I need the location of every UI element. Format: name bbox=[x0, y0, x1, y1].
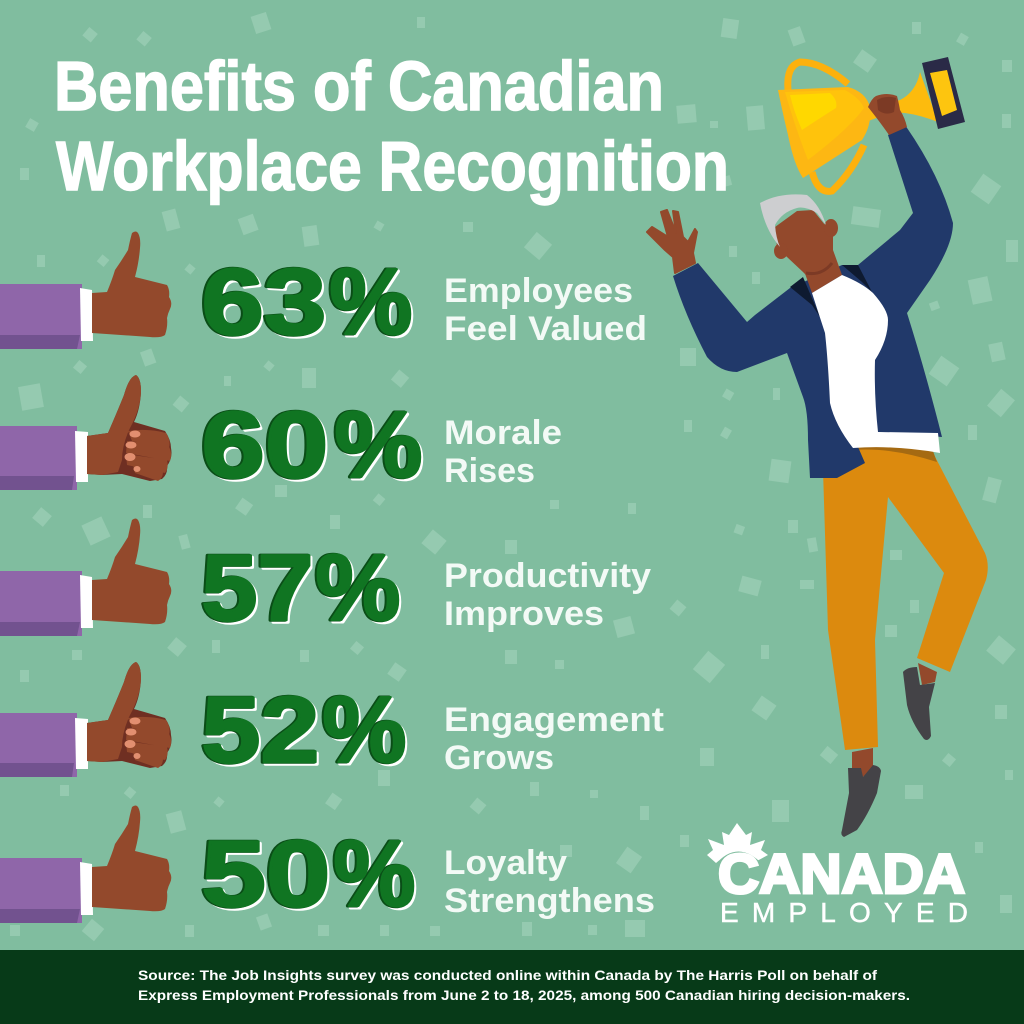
label bbox=[444, 414, 562, 490]
percentage 52: 52 bbox=[203, 679, 321, 784]
label bbox=[444, 701, 664, 777]
stat row: 63% employees feel valued bbox=[0, 232, 647, 356]
icon: thumbs up bbox=[0, 232, 171, 349]
percentage 50 bbox=[200, 821, 417, 928]
label bbox=[444, 844, 655, 920]
percentage 57: % bbox=[317, 537, 402, 642]
percentage 50: % bbox=[335, 823, 417, 928]
percentage 57: 57 bbox=[202, 535, 314, 640]
label: Morale bbox=[444, 414, 562, 452]
percentage 52: % bbox=[322, 677, 406, 782]
percentage 50: 50 bbox=[202, 821, 330, 926]
icon: thumbs up, back of hand bbox=[0, 662, 172, 777]
percentage 52: 52 bbox=[200, 677, 318, 782]
percentage 60: % bbox=[334, 392, 422, 497]
illustration: jumping person bbox=[647, 94, 988, 837]
title: Workplace Recognition bbox=[56, 127, 729, 205]
waving left hand bbox=[647, 210, 697, 273]
percentage 50: 50 bbox=[200, 821, 329, 926]
percentage 63: % bbox=[331, 251, 414, 356]
percentage 60: 60 bbox=[203, 394, 330, 499]
logo: Canada Employed bbox=[707, 823, 968, 928]
percentage 57: 57 bbox=[200, 535, 312, 640]
percentage 60: 60 bbox=[202, 392, 328, 497]
label: Employees bbox=[444, 272, 633, 310]
neck bbox=[803, 250, 842, 293]
collar bbox=[790, 277, 820, 317]
percentage 63 bbox=[200, 249, 414, 356]
percentage 50: % bbox=[332, 821, 414, 926]
icon: thumbs up bbox=[0, 806, 171, 923]
logo: Canada Employed: EMPLOYED bbox=[720, 897, 968, 928]
socks bbox=[852, 748, 873, 777]
label bbox=[444, 557, 651, 633]
label: Improves bbox=[444, 595, 604, 633]
jacket bbox=[673, 125, 953, 478]
percentage 50: % bbox=[334, 821, 416, 926]
percentage 63: 63 bbox=[200, 249, 325, 354]
source text: Source: The Job Insights survey was conducted online within Canada by The Harris Poll on behalf of bbox=[138, 968, 878, 983]
stat row: 57% productivity improves bbox=[0, 518, 651, 642]
label: Engagement bbox=[444, 701, 664, 739]
icon: maple leaf bbox=[707, 823, 768, 863]
percentage 50: 50 bbox=[203, 823, 332, 928]
percentage 63: 63 bbox=[203, 251, 328, 356]
percentage 57: 57 bbox=[203, 537, 315, 642]
source footer bbox=[0, 950, 1024, 1024]
head bbox=[775, 210, 833, 279]
source text: Express Employment Professionals from June 2 to 18, 2025, among 500 Canadian hiring decision-makers. bbox=[138, 988, 910, 1003]
label: Rises bbox=[444, 452, 535, 490]
label: Loyalty bbox=[444, 844, 567, 882]
stat row: 50% loyalty strengthens bbox=[0, 806, 655, 928]
percentage 60: % bbox=[336, 394, 424, 499]
label: Strengthens bbox=[444, 882, 655, 920]
illustration: trophy bbox=[778, 57, 965, 191]
logo: Canada Employed: CANADA bbox=[718, 842, 965, 905]
grey hair bbox=[760, 194, 826, 247]
percentage 60: % bbox=[333, 392, 421, 497]
percentage 52: % bbox=[324, 679, 408, 784]
raised hand on trophy bbox=[868, 94, 907, 135]
label: Grows bbox=[444, 739, 554, 777]
label bbox=[444, 272, 647, 348]
title bbox=[54, 47, 729, 205]
label: Productivity bbox=[444, 557, 651, 595]
percentage 63: % bbox=[330, 249, 412, 354]
stat row: 52% engagement grows bbox=[0, 662, 664, 784]
percentage 52: % bbox=[321, 677, 405, 782]
white shirt bbox=[812, 275, 940, 453]
icon: thumbs up, back of hand bbox=[0, 375, 172, 490]
percentage 57 bbox=[200, 535, 402, 642]
source text bbox=[138, 968, 910, 1003]
percentage 57: % bbox=[314, 535, 399, 640]
percentage 60 bbox=[200, 392, 424, 499]
percentage 57: % bbox=[316, 535, 400, 640]
icon: thumbs up bbox=[0, 518, 171, 636]
percentage 60: 60 bbox=[200, 392, 327, 497]
shoes bbox=[841, 765, 881, 837]
trousers bbox=[823, 447, 988, 750]
stat row: 60% morale rises bbox=[0, 375, 562, 499]
percentage 52: 52 bbox=[202, 677, 320, 782]
percentage 63: % bbox=[328, 249, 411, 354]
percentage 63: 63 bbox=[202, 249, 326, 354]
label: Feel Valued bbox=[444, 310, 647, 348]
percentage 52 bbox=[200, 677, 408, 784]
title: Benefits of Canadian bbox=[54, 47, 664, 125]
